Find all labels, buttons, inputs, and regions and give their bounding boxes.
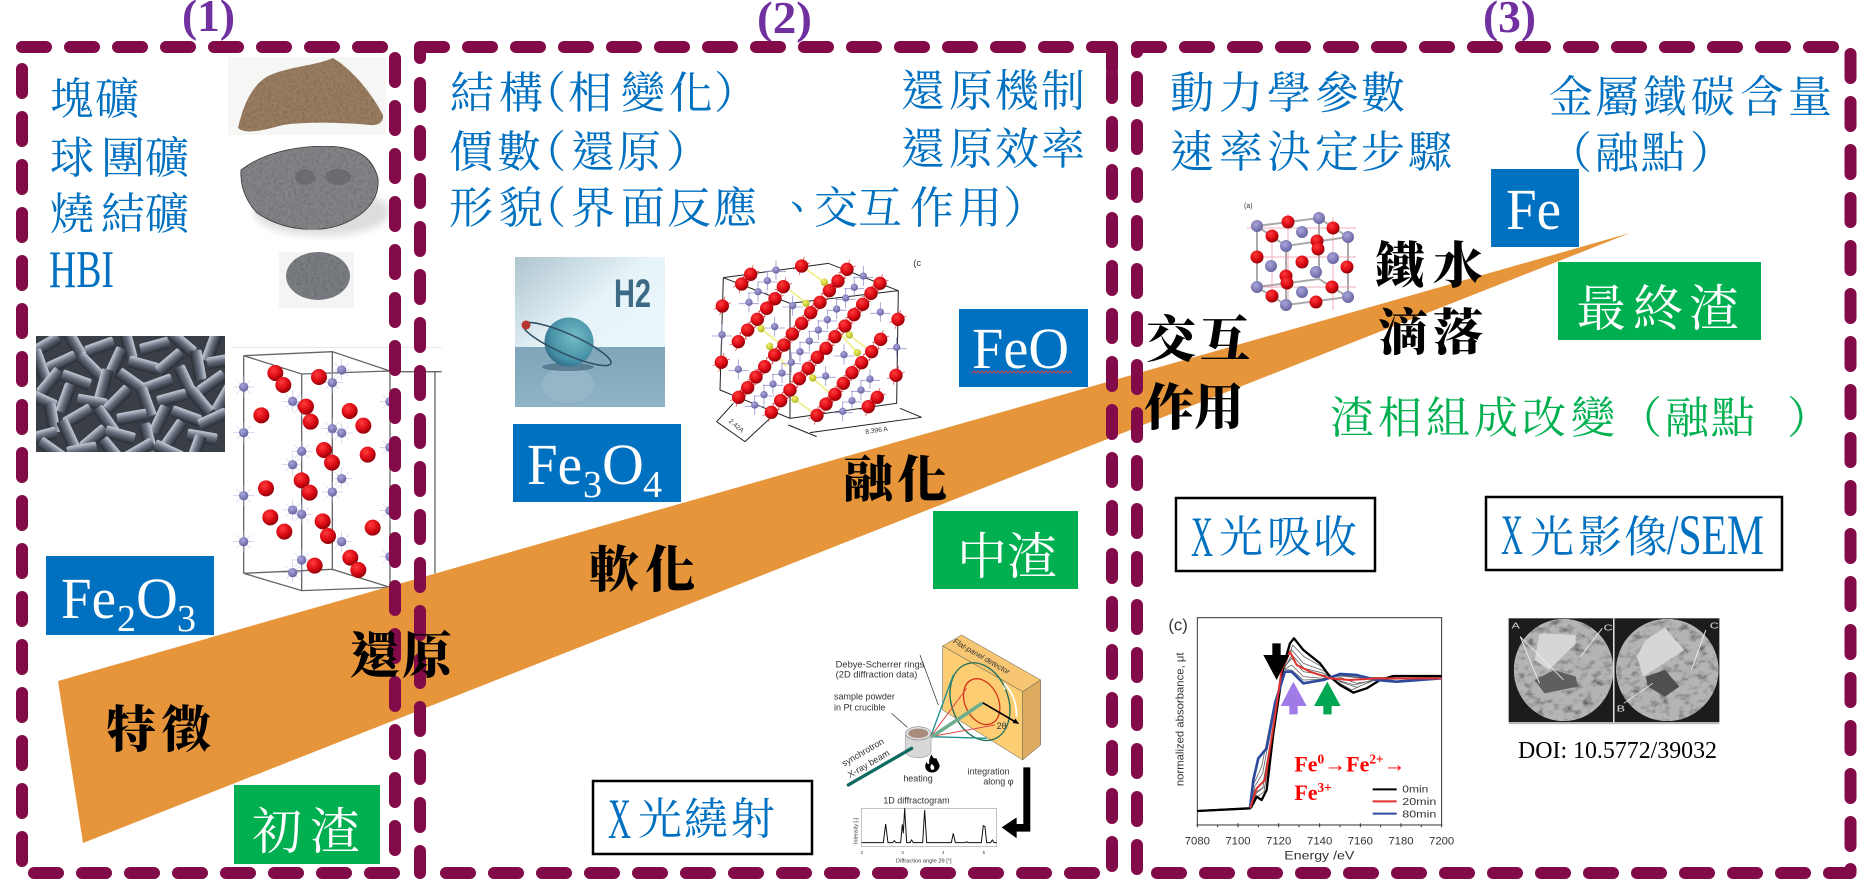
chart: XANES normalized absorbance vs energy: 7140 bbox=[1307, 835, 1332, 847]
diagram: synchrotron X-ray diffraction setup: heating bbox=[903, 773, 933, 783]
text: melting point: （融點） bbox=[1548, 129, 1734, 178]
picture: H2 molecule bbox=[515, 257, 665, 407]
diagram: synchrotron X-ray diffraction setup: (2D diffraction data) bbox=[836, 670, 917, 680]
panel 3 blue text bbox=[1170, 69, 1832, 178]
diagram: synchrotron X-ray diffraction setup: 4 bbox=[942, 850, 945, 855]
image: X-ray tomography cross sections: B bbox=[1617, 704, 1625, 714]
chart: XANES normalized absorbance vs energy: Fe bbox=[1294, 780, 1318, 805]
chart: XANES normalized absorbance vs energy: 80min bbox=[1402, 809, 1437, 820]
panel: reduction and softening border bbox=[420, 47, 1112, 873]
diagram: synchrotron X-ray diffraction setup: sample powder bbox=[834, 691, 895, 701]
chart: XANES normalized absorbance vs energy: 20min bbox=[1402, 797, 1437, 808]
picture: H2 molecule: H2 bbox=[614, 272, 651, 316]
crystal structure: Fe3O4 bbox=[712, 257, 922, 442]
chip: final slag: 最終渣 bbox=[1576, 281, 1739, 337]
chip: primary slag: 初渣 bbox=[252, 804, 360, 860]
panel: interaction and dripping border bbox=[1137, 47, 1850, 873]
box: X-ray imaging / SEM: /SEM bbox=[1667, 504, 1764, 567]
text: reduction mechanism: 還原機制 bbox=[901, 67, 1085, 116]
diagram: synchrotron X-ray diffraction setup: 5 bbox=[983, 850, 986, 855]
text: reduction efficiency: 還原效率 bbox=[901, 125, 1085, 174]
chip: Fe3O4: Fe bbox=[527, 432, 582, 497]
chart: XANES normalized absorbance vs energy: 0 bbox=[1318, 752, 1325, 767]
text: kinetic parameters: 動力學參數 bbox=[1170, 69, 1405, 118]
image: X-ray tomography cross sections: C bbox=[1604, 623, 1613, 633]
chip: Fe2O3 bbox=[46, 556, 214, 640]
chart: XANES normalized absorbance vs energy: Fe bbox=[1294, 752, 1318, 777]
chart: XANES normalized absorbance vs energy: normalized absorbance, μt bbox=[1174, 652, 1186, 786]
panel numbers bbox=[182, 0, 1536, 43]
chip: primary slag bbox=[234, 785, 380, 864]
box: X-ray absorption: X bbox=[1191, 506, 1213, 569]
panel 1 blue text list bbox=[49, 75, 192, 299]
chip: Fe3O4 bbox=[513, 424, 681, 506]
box: X-ray absorption bbox=[1176, 498, 1375, 571]
diagram: synchrotron X-ray diffraction setup: 2 bbox=[861, 850, 864, 855]
label: molten iron dripping: 鐵水 bbox=[1375, 238, 1483, 294]
text: metallic iron carbon content: 金屬鐵碳含量 bbox=[1549, 73, 1832, 122]
crystal structure: Fe3O4: 2.42A bbox=[727, 418, 745, 435]
chart: XANES normalized absorbance vs energy: → bbox=[1384, 752, 1406, 777]
text: lump ore: 塊礦 bbox=[50, 75, 142, 124]
text: valence: 價數（還原） bbox=[449, 128, 710, 177]
chart: XANES normalized absorbance vs energy: 7200 bbox=[1429, 835, 1454, 847]
chip: Fe3O4: 4 bbox=[643, 464, 662, 506]
chart: XANES normalized absorbance vs energy: 2+ bbox=[1369, 752, 1384, 767]
chart: XANES normalized absorbance vs energy: 7180 bbox=[1388, 835, 1414, 847]
chip: intermediate slag bbox=[933, 511, 1078, 589]
label: interaction bbox=[1144, 312, 1250, 436]
crystal structure: FeO wustite: (a) bbox=[1244, 203, 1253, 210]
box: X-ray diffraction bbox=[593, 781, 812, 854]
label: characteristics: 特徵 bbox=[106, 702, 211, 758]
diagram: synchrotron X-ray diffraction setup: Intensity [-] bbox=[853, 817, 859, 844]
orange process arrow bbox=[58, 233, 1630, 843]
diagram: synchrotron X-ray diffraction setup: Diffraction angle 2θ [°] bbox=[896, 858, 952, 864]
label: melting: 融化 bbox=[843, 452, 947, 508]
image: X-ray tomography cross sections bbox=[1509, 618, 1719, 724]
photo: lump ore bbox=[228, 57, 386, 135]
label: molten iron dripping bbox=[1375, 238, 1483, 361]
label: interaction: 作用 bbox=[1144, 380, 1244, 436]
diagram: synchrotron X-ray diffraction setup: Debye-Scherrer rings bbox=[836, 659, 925, 669]
label: softening: 軟化 bbox=[589, 542, 695, 598]
crystal structure: Fe3O4: 8.396 A bbox=[865, 426, 889, 436]
chip: Fe2O3: 3 bbox=[177, 598, 196, 640]
box: X-ray imaging / SEM bbox=[1486, 497, 1782, 570]
label: reduction: 還原 bbox=[350, 628, 456, 684]
diagram: synchrotron X-ray diffraction setup: 2θ bbox=[997, 721, 1007, 731]
text: slag composition change: 渣相組成改變（融點） bbox=[1330, 394, 1831, 443]
box: X-ray imaging / SEM: 光影像 bbox=[1530, 513, 1668, 562]
chip: Fe3O4: 3 bbox=[583, 464, 602, 506]
chart: XANES normalized absorbance vs energy: 3+ bbox=[1318, 780, 1332, 795]
chip: FeO bbox=[959, 309, 1088, 387]
image: X-ray tomography cross sections: A bbox=[1512, 621, 1521, 631]
box: X-ray imaging / SEM: X bbox=[1501, 504, 1523, 567]
text: pellets: 球團礦 bbox=[50, 134, 192, 183]
text: HBI: HBI bbox=[49, 241, 114, 299]
chip: Fe bbox=[1491, 169, 1579, 247]
box: X-ray diffraction: X bbox=[608, 788, 631, 851]
image: X-ray tomography cross sections: C bbox=[1710, 621, 1719, 631]
crystal structure: Fe2O3 bbox=[232, 347, 442, 591]
panel 2 blue text bbox=[449, 67, 1085, 233]
diagram: synchrotron X-ray diffraction setup: integration bbox=[968, 766, 1010, 776]
crystal structure: Fe3O4: (c bbox=[913, 258, 921, 268]
diagram: synchrotron X-ray diffraction setup: in Pt crucible bbox=[834, 702, 885, 712]
diagram: synchrotron X-ray diffraction setup: X-ray beam bbox=[846, 748, 891, 780]
chart: XANES normalized absorbance vs energy: Energy /eV bbox=[1284, 848, 1354, 862]
chip: Fe3O4: O bbox=[602, 432, 644, 497]
chart: XANES normalized absorbance vs energy: 7100 bbox=[1225, 835, 1251, 847]
diagram: synchrotron X-ray diffraction setup: 3 bbox=[901, 850, 904, 855]
diagram: synchrotron X-ray diffraction setup: 1D diffractogram bbox=[883, 795, 950, 805]
crystal structure: FeO wustite bbox=[1244, 203, 1356, 311]
panel 2 images bbox=[515, 257, 1041, 864]
photo: HBI briquettes bbox=[36, 336, 225, 452]
diagram: synchrotron X-ray diffraction setup: Flat-panel detector bbox=[952, 637, 1012, 677]
label: molten iron dripping: 滴落 bbox=[1378, 305, 1483, 361]
black process labels bbox=[106, 238, 1483, 758]
label: interaction: 交互 bbox=[1146, 312, 1250, 368]
panel 1 images bbox=[26, 57, 442, 591]
chart: XANES normalized absorbance vs energy: (c) bbox=[1168, 616, 1188, 635]
chart: XANES normalized absorbance vs energy: 7120 bbox=[1266, 835, 1291, 847]
text: morphology: 形貌（界面反應、交互作用） bbox=[449, 184, 1047, 233]
box: X-ray diffraction: 光繞射 bbox=[638, 795, 775, 844]
chart: XANES normalized absorbance vs energy: 0min bbox=[1402, 785, 1429, 796]
chip: FeO: FeO bbox=[972, 316, 1069, 381]
chip: Fe2O3: 2 bbox=[117, 598, 136, 640]
chart: XANES normalized absorbance vs energy: →Fe bbox=[1324, 752, 1370, 777]
chart: XANES normalized absorbance vs energy: 7160 bbox=[1348, 835, 1373, 847]
panel: characteristics border bbox=[22, 47, 395, 873]
panel 3 images bbox=[1168, 203, 1719, 862]
chip: final slag bbox=[1558, 262, 1761, 340]
diagram: synchrotron X-ray diffraction setup bbox=[834, 635, 1041, 864]
chip: intermediate slag: 中渣 bbox=[957, 529, 1057, 585]
diagram: synchrotron X-ray diffraction setup: along φ bbox=[983, 777, 1014, 787]
chip: Fe2O3: Fe bbox=[61, 566, 116, 631]
chart: XANES normalized absorbance vs energy: 7080 bbox=[1185, 835, 1210, 847]
chart: XANES normalized absorbance vs energy bbox=[1168, 616, 1454, 862]
chip: Fe: Fe bbox=[1506, 177, 1561, 242]
photo: pellet ore bbox=[241, 146, 390, 236]
chip: Fe2O3: O bbox=[136, 566, 178, 631]
citation: DOI: DOI: 10.5772/39032 bbox=[1518, 738, 1717, 764]
diagram: synchrotron X-ray diffraction setup: φ bbox=[1003, 684, 1008, 691]
text: sinter: 燒結礦 bbox=[50, 190, 192, 239]
diagram: synchrotron X-ray diffraction setup: synchrotron bbox=[840, 736, 886, 768]
text: rate-determining step: 速率決定步驟 bbox=[1170, 128, 1452, 177]
text: structure: 結構（相變化） bbox=[450, 69, 758, 118]
photo: sinter bbox=[279, 252, 354, 308]
box: X-ray absorption: 光吸收 bbox=[1219, 513, 1357, 562]
